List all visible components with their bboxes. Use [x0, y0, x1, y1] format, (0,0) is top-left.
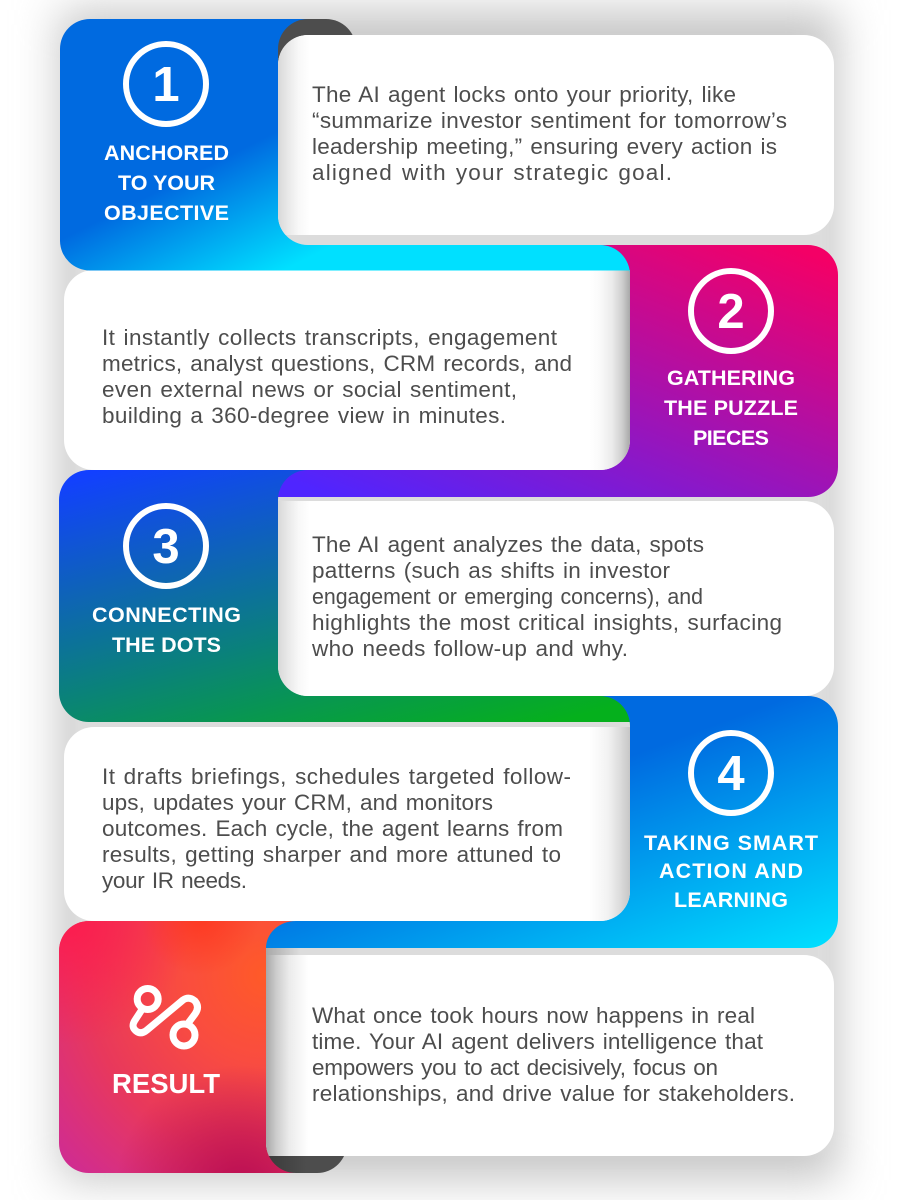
panel: step 2 gathering the puzzle pieces: [64, 245, 838, 500]
heading: step 1: TO YOUR: [118, 171, 215, 195]
step 4 gradient block: [266, 696, 838, 948]
heading: step 3: [92, 603, 241, 657]
text: step 3 body: [311, 532, 782, 661]
step 2 gradient block: [278, 245, 838, 500]
result gradient block: [59, 921, 320, 1173]
step 3 gradient block: [59, 470, 630, 726]
text: result body: What once took hours now happens in real: [312, 1003, 755, 1028]
card: step 4 text: [64, 722, 630, 921]
step 1 gradient block: [60, 19, 630, 275]
text: step 3 body: The AI agent analyzes the data, spots: [312, 532, 704, 557]
heading: step 3: THE DOTS: [112, 633, 221, 657]
number badge 4: 4: [717, 747, 745, 801]
panel: step 3 connecting the dots: [59, 470, 834, 726]
number badge 2: 2: [717, 285, 745, 339]
panel: step 5 result: [59, 921, 834, 1173]
text: step 4 body: [102, 764, 571, 893]
text: step 4 body: your IR needs.: [102, 868, 247, 893]
text: step 2 body: [102, 325, 572, 428]
text: result body: [312, 1003, 795, 1106]
heading: step 4: [644, 831, 818, 912]
dark tab below result card: [266, 1100, 347, 1173]
number badge 1: 1: [152, 58, 180, 112]
text: step 3 body: who needs follow-up and why.: [311, 636, 628, 661]
heading: step 4: ACTION AND: [659, 859, 803, 883]
text: step 3 body: patterns (such as shifts in investor: [312, 558, 670, 583]
text: result body: relationships, and drive value for stakeholders.: [312, 1081, 795, 1106]
text: step 1 body: aligned with your strategic goal.: [312, 160, 672, 185]
icon: connected path: [133, 988, 198, 1046]
text: step 4 body: results, getting sharper and more attuned to: [102, 842, 561, 867]
number badge 2: [691, 271, 771, 351]
number badge 3: [126, 506, 206, 586]
number badge 4: [691, 733, 771, 813]
text: step 1 body: “summarize investor sentiment for tomorrow’s: [312, 108, 787, 133]
text: step 3 body: engagement or emerging concerns), and: [312, 584, 703, 609]
heading: step 2: THE PUZZLE: [664, 396, 798, 420]
text: step 1 body: leadership meeting,” ensuring every action is: [312, 134, 777, 159]
heading: step 4: LEARNING: [674, 888, 788, 912]
heading: step 4: TAKING SMART: [644, 831, 818, 855]
heading: result: RESULT: [112, 1068, 220, 1099]
text: step 2 body: even external news or social sentiment,: [102, 377, 517, 402]
text: step 2 body: metrics, analyst questions, CRM records, and: [102, 351, 572, 376]
text: step 4 body: outcomes. Each cycle, the agent learns from: [102, 816, 563, 841]
number badge 1: [126, 44, 206, 124]
text: step 1 body: [312, 82, 787, 185]
card: result text: [266, 948, 834, 1156]
text: step 3 body: highlights the most critical insights, surfacing: [312, 610, 782, 635]
text: step 4 body: ups, updates your CRM, and monitors: [102, 790, 493, 815]
card: step 1 text: [278, 35, 834, 245]
panel: step 1 anchored to your objective: [60, 19, 834, 275]
card: step 3 text: [278, 497, 834, 696]
heading: step 1: [104, 141, 229, 225]
text: result body: empowers you to act decisively, focus on: [312, 1055, 718, 1080]
heading: step 2: PIECES: [693, 426, 769, 450]
text: step 4 body: It drafts briefings, schedules targeted follow-: [102, 764, 571, 789]
text: step 2 body: building a 360-degree view in minutes.: [102, 403, 506, 428]
heading: step 1: ANCHORED: [104, 141, 229, 165]
dark tab above card: [278, 19, 356, 89]
heading: step 1: OBJECTIVE: [104, 201, 229, 225]
heading: step 2: [664, 366, 798, 450]
text: step 2 body: It instantly collects transcripts, engagement: [102, 325, 558, 350]
panel: step 4 taking smart action: [64, 696, 838, 948]
heading: step 3: CONNECTING: [92, 603, 241, 627]
text: step 1 body: The AI agent locks onto your priority, like: [312, 82, 736, 107]
text: result body: time. Your AI agent delivers intelligence that: [312, 1029, 764, 1054]
card: step 2 text: [64, 270, 630, 470]
heading: step 2: GATHERING: [667, 366, 795, 390]
number badge 3: 3: [152, 520, 180, 574]
